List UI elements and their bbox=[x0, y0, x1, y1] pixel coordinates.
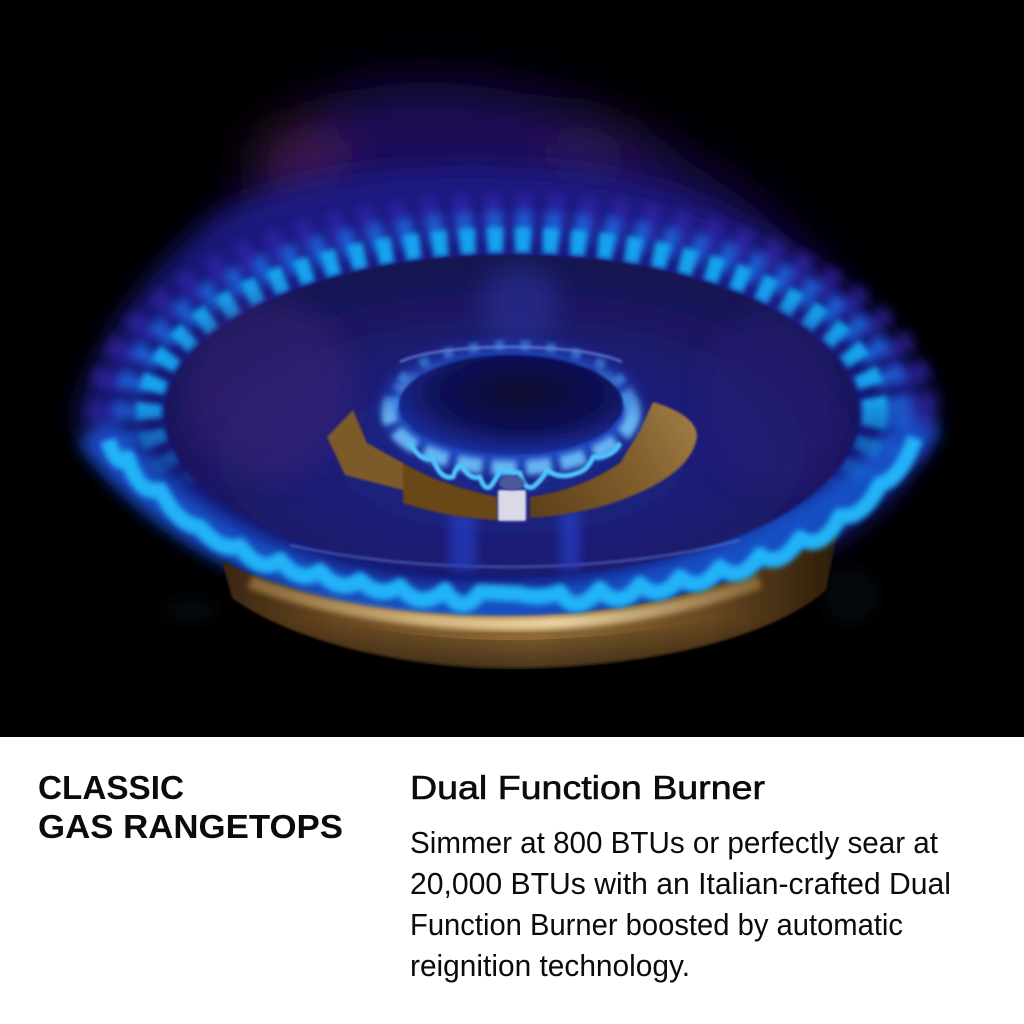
upper inner flame arc bbox=[400, 347, 622, 362]
heading: classic gas rangetops bbox=[38, 769, 343, 845]
heading: classic gas rangetops: CLASSIC bbox=[38, 769, 184, 806]
body text bbox=[410, 825, 951, 983]
body text: reignition technology. bbox=[410, 948, 690, 983]
reflected flame streaks bbox=[450, 510, 580, 570]
lower flame scallops bbox=[108, 438, 915, 605]
purple flame haze bbox=[204, 50, 862, 321]
igniter tip bbox=[499, 476, 525, 490]
plate left purple tint bbox=[185, 300, 355, 480]
outer blue flame glow bbox=[78, 166, 933, 614]
subheading: dual function burner: Dual Function Burner bbox=[410, 769, 765, 806]
text panel background bbox=[0, 737, 1024, 1024]
burner cap bbox=[399, 355, 623, 455]
inner brass burner bbox=[327, 402, 697, 520]
plate right purple tint bbox=[729, 296, 848, 434]
heading: classic gas rangetops: GAS RANGETOPS bbox=[38, 808, 343, 845]
body text: Function Burner boosted by automatic bbox=[410, 907, 903, 942]
body text: Simmer at 800 BTUs or perfectly sear at bbox=[410, 825, 938, 860]
cooktop shadow under burner bbox=[172, 572, 873, 618]
plate lower reflection line bbox=[290, 540, 740, 567]
plate top reflection bbox=[480, 265, 560, 345]
ring highlight bbox=[250, 582, 760, 624]
burner plate bbox=[166, 255, 858, 575]
body text: 20,000 BTUs with an Italian-crafted Dual bbox=[410, 866, 951, 901]
inner top flames bbox=[391, 338, 629, 423]
inner flame glow bbox=[383, 346, 639, 470]
photo: gas burner with blue flames bbox=[0, 0, 1024, 737]
brass outer ring bbox=[222, 530, 838, 668]
lower deep blue glow bbox=[95, 420, 925, 606]
inner wavy flames bbox=[410, 443, 620, 488]
igniter bbox=[498, 490, 526, 521]
inner flame petals bbox=[389, 356, 633, 468]
upper flames: three layers fading outward bbox=[82, 191, 942, 484]
